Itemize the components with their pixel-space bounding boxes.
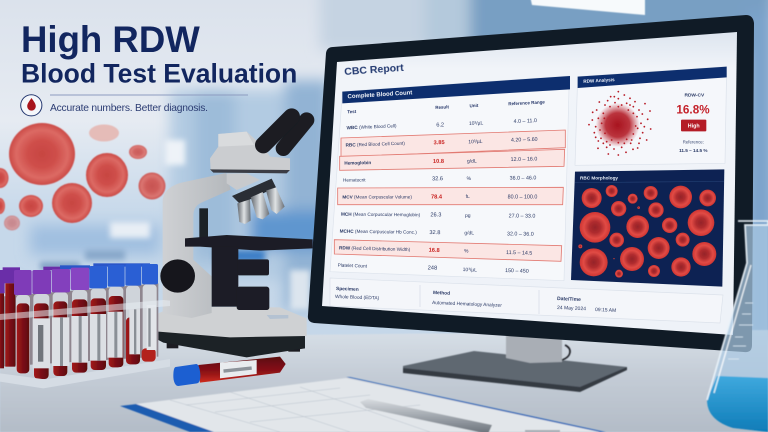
tagline with blood drop icon: Accurate numbers. Better diagnosis. [50,103,208,114]
row: RDW: RDW (Red Cell Distribution Width) [339,245,411,252]
date and time: Date/Time [557,296,581,303]
rack frame [0,300,170,388]
monitor stand base [403,351,627,391]
red blood cells floating [0,123,166,230]
row: RBC: RBC (Red Blood Cell Count) [346,141,405,148]
microscope base [158,307,307,357]
specimen: Specimen [336,286,359,293]
row: hemoglobin: 12.0 – 16.0 [511,156,537,163]
RDW-CV value: Reference: [683,140,704,145]
column headings: Test [347,109,357,114]
RDW-CV value: 16.8% [676,103,710,116]
row: WBC: WBC (White Blood Cell) [346,123,397,130]
row: WBC [346,118,537,130]
panel: RBC morphology: RBC Morphology [580,175,618,180]
back tubes [0,263,158,368]
row: RBC [346,137,538,148]
tube purple 1 [14,270,32,373]
monitor screen [322,32,737,335]
eyepieces [263,117,307,148]
table header band: Complete Blood Count [347,90,412,100]
table header band [342,76,570,103]
row: WBC: 10³/µL [469,120,484,127]
row: hematocrit: 32.6 [432,176,443,182]
row: platelet count [338,263,529,275]
tube purple 2 [32,270,51,379]
row: hemoglobin: g/dL [467,158,477,165]
row: MCH: 26.3 [430,212,441,218]
focus knob [160,259,195,293]
row: MCHC: 32.0 – 36.0 [507,231,534,238]
row: MCV: 78.4 [431,195,443,201]
ceiling light [530,0,645,15]
tube blue 1 [89,266,107,370]
row: MCHC: MCHC (Mean Corpuscular Hb Conc.) [340,229,417,235]
row: RDW: 16.8 [429,248,440,254]
row: MCH: MCH (Mean Corpuscular Hemoglobin) [341,212,421,217]
pen [360,399,560,432]
row: MCV: MCV (Mean Corpuscular Volume) [342,195,412,200]
report heading: CBC Report [344,62,405,78]
scatter plot [589,92,651,155]
panel: RDW analysis [575,67,727,165]
title: Blood Test Evaluation [21,59,297,89]
row: hematocrit: Hematocrit [343,177,366,183]
row: hemoglobin: 10.8 [433,159,444,165]
row: platelet count: 150 – 450 [505,268,529,275]
panel: RBC morphology [571,169,724,287]
specimen [335,286,380,302]
microscope head [210,132,290,171]
panel: complete blood count [330,76,570,281]
row: MCH: pg [465,213,471,219]
row: platelet count: Platelet Count [338,263,368,269]
highlight boxes [334,130,565,261]
row: hematocrit [343,175,536,183]
desk surface [0,330,768,432]
title: High RDW [21,19,200,60]
row: WBC: 4.0 – 11.0 [513,118,537,125]
monitor stand [403,335,627,392]
tube lying on desk [173,357,286,386]
row: MCV: 80.0 – 100.0 [508,194,537,200]
panel: specimen details [330,278,723,323]
row: MCHC: 32.8 [429,230,440,236]
column headings [347,99,545,114]
row: MCH: 27.0 – 33.0 [509,213,535,220]
morphology cells [578,185,716,278]
date and time: 09:15 AM [595,307,616,314]
column headings: Unit [469,103,479,108]
row: WBC: 6.2 [436,122,444,129]
panel: RDW analysis: RDW Analysis [583,77,615,84]
row: RDW: % [464,248,469,254]
tube purple 3 [52,269,70,376]
row: hemoglobin: Hemoglobin [344,160,371,166]
row: MCV [342,194,537,201]
row: RBC: 10³/µL [468,139,483,145]
row: MCV: fL [466,194,470,200]
row: hemoglobin [344,156,537,166]
stage and focus [185,235,313,310]
RDW-CV value: 11.5 – 14.5 % [679,148,708,153]
column headings: Reference Range [508,99,545,106]
row: hematocrit: % [467,176,472,182]
row: MCHC: g/dL [464,230,474,236]
tube blue 2 [107,265,125,367]
row: RDW: 11.5 – 14.5 [506,250,532,257]
RDW-CV value [676,93,710,153]
row: MCH [341,212,535,220]
objectives [232,179,285,224]
row: RBC: 3.85 [434,140,445,146]
tube blue 3 [125,264,141,364]
tube blue 4 [142,264,158,362]
date and time [557,296,616,314]
chart grid on paper [170,387,430,432]
row: RDW [339,245,532,257]
row: MCHC [340,229,534,238]
row: platelet count: 248 [428,265,437,272]
method: Automated Hematology Analyzer [432,300,502,309]
row: RBC: 4.20 – 5.60 [511,137,538,144]
specimen: Whole Blood (EDTA) [335,294,380,302]
icon: blood drop [21,95,42,116]
method [432,290,502,309]
test tube rack [0,263,170,388]
clipboard with chart [120,377,606,432]
row: hematocrit: 36.0 – 46.0 [510,175,536,182]
method: Method [433,290,450,297]
tagline with blood drop icon [21,95,248,116]
microscope arm [163,173,231,318]
RDW-CV value: RDW-CV [684,93,705,99]
high badge: High [688,123,700,129]
flask with blue liquid [707,221,768,432]
tube purple 4 [71,268,89,373]
monitor bezel [308,15,754,352]
column headings: Result [435,104,450,110]
microscope [158,117,313,357]
monitor stand neck [506,335,562,363]
row: platelet count: 10³/µL [463,267,477,273]
title [21,19,297,89]
date and time: 24 May 2024 [557,305,586,312]
